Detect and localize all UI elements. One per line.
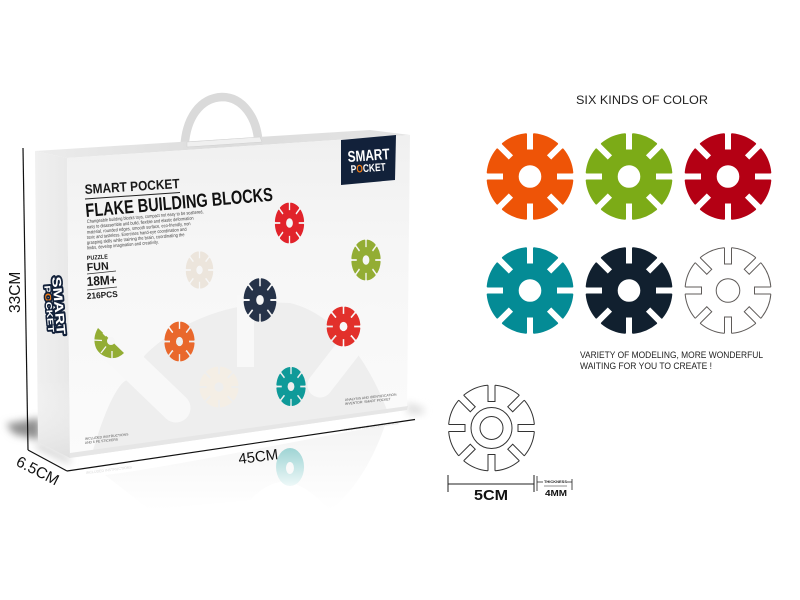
box fine print right [345,393,397,406]
reflection of box on floor [86,421,399,510]
dimension line: depth [28,450,67,471]
dimension: thickness 4MM: 4MM [545,489,567,498]
box side logo: P O CKET [42,285,56,334]
box fine print left: AND 6 PE STICKERS [85,437,119,445]
caption: variety of modeling [580,350,763,372]
label: 45CM: 45CM [237,446,279,468]
front background arch graphic [94,303,386,450]
colour disc: red [686,134,770,219]
box specs: PUZZLE [87,255,108,262]
product box [35,97,410,470]
box disc: teal [277,368,305,405]
dimension: 5CM [448,475,534,504]
box specs: 216PCS [86,289,118,301]
box specs [86,255,118,301]
box description: grasping skills while training the brain, coordinating the [87,232,185,245]
reflection of box on floor: ANALYSIS AND IDENTIFICATION [344,421,399,432]
box disc: cream large [200,368,238,406]
colour disc: orange [488,134,572,219]
box description: limbs, develop imagination and creativity. [87,239,159,250]
box description: easy to disassemble and build, flexible and elastic deformation [87,216,194,229]
box half disc: green [93,328,124,359]
box heading: smart pocket: SMART POCKET [84,176,181,197]
size diagram disc [449,386,534,470]
dimension line: width [67,420,415,471]
box fine print left [85,432,129,445]
colour disc: outline [686,248,770,333]
caption: variety of modeling: VARIETY OF MODELING, MORE WONDERFUL [580,350,763,361]
caption: variety of modeling: WAITING FOR YOU TO CREATE ! [580,361,712,372]
label: 6.5CM: 6.5CM [13,453,62,489]
box top face [35,130,410,158]
box front face [67,135,410,458]
heading: six kinds of color: SIX KINDS OF COLOR [576,93,708,107]
floor shadow [6,402,424,464]
box fine print right: INVENTOR: SMART POCKET [345,397,391,406]
dimension line: height [23,148,28,450]
dimension: 5CM: 5CM [474,487,508,504]
box disc: orange [165,322,194,361]
box specs: FUN [86,260,109,274]
box description: material, rounded edges, smooth surface, eco-friendly, non [87,221,191,235]
box fine print left: INCLUDED INSTRUCTIONS [85,432,129,441]
box side logo: SMART [49,276,68,335]
box description: toxic and tasteless. Exercises hand-eye coordination and [87,227,187,240]
colour disc: green [587,134,671,219]
dimension: thickness 4MM [537,476,572,498]
box fine print right: ANALYSIS AND IDENTIFICATION [345,393,397,402]
box side logo [42,276,68,336]
box left side [35,151,70,458]
box title: FLAKE BUILDING BLOCKS [85,185,274,222]
box brand logo: POCKET [350,162,386,176]
box disc: navy [244,279,276,321]
box disc: red small [327,307,360,346]
box description: Changeable building blocks toys, compact not easy to be scattered, [87,209,204,224]
label: 33CM: 33CM [7,272,24,313]
box disc: cream [186,252,213,288]
dimension: thickness 4MM: THICKNESS [544,480,567,484]
box specs: 18M+ [86,272,117,289]
box description [87,209,204,250]
colour disc: navy [587,248,671,333]
box brand logo [341,135,396,185]
box disc: green [352,241,380,279]
box brand logo: SMART [347,146,391,166]
colour disc: teal [488,248,572,333]
handle [184,97,258,147]
reflection of box on floor: INCLUDED INSTRUCTIONS [86,465,133,475]
box disc: red [276,204,303,242]
